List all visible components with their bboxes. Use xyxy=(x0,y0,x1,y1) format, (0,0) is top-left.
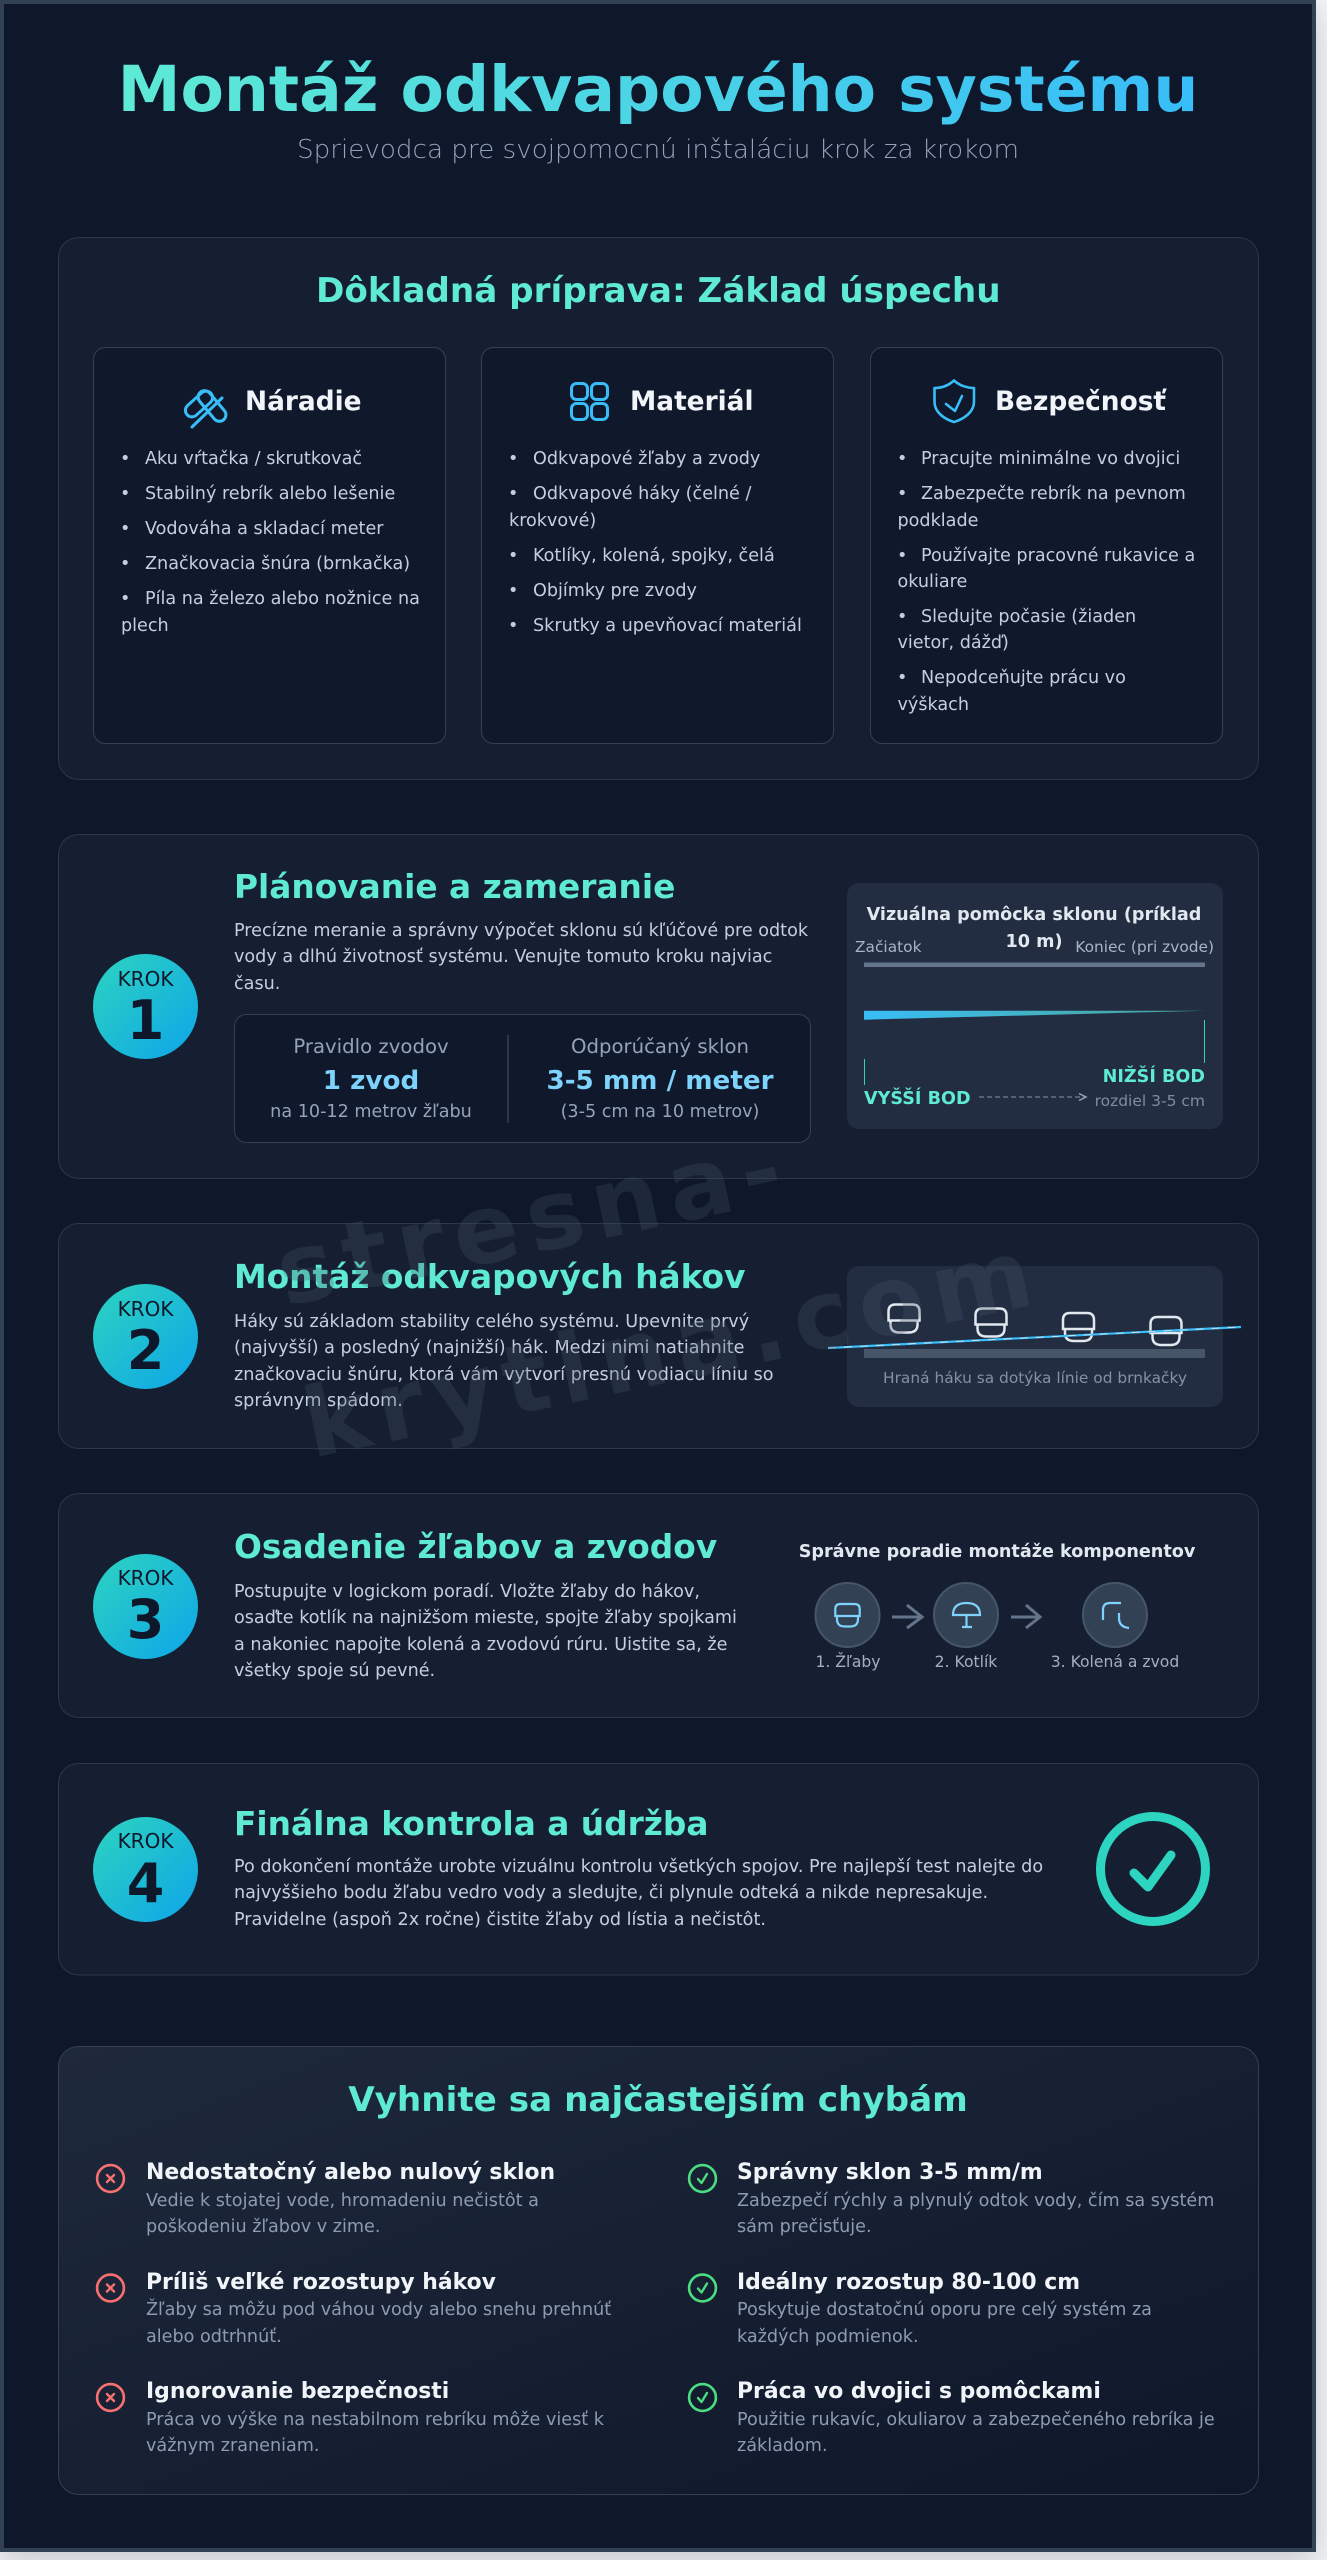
list: tools: Značkovacia šnúra (brnkačka) xyxy=(145,554,410,574)
item: right 3: Práca vo dvojici s pomôckami xyxy=(737,2379,1101,2404)
list: material: Odkvapové žľaby a zvody xyxy=(533,449,760,469)
card heading: tools: Náradie xyxy=(245,386,362,417)
text: step 3 xyxy=(234,1582,737,1681)
list: safety: • xyxy=(897,668,907,688)
heading: preparation: Dôkladná príprava: Základ úspechu xyxy=(316,271,1001,311)
list: safety: • xyxy=(897,607,907,627)
icon: hook 4 xyxy=(1150,1317,1182,1345)
text: step 3: osaďte kotlík na najnižšom mieste, spojte žľaby spojkami xyxy=(234,1608,737,1628)
icon: elbow xyxy=(1083,1583,1147,1647)
chart: slope diagram xyxy=(847,883,1223,1129)
icon: check xyxy=(1100,1816,1206,1922)
badge: step 3 xyxy=(93,1554,198,1659)
list: safety: • xyxy=(897,484,907,504)
chart: hooks diagram: Hraná háku sa dotýka línie od brnkačky xyxy=(883,1369,1187,1387)
badge: step 2 xyxy=(93,1284,198,1389)
item: wrong 1: Nedostatočný alebo nulový sklon xyxy=(146,2160,555,2185)
chart: assembly order: Správne poradie montáže komponentov xyxy=(799,1542,1196,1562)
list: material: • xyxy=(508,616,518,636)
icon: hook 1 xyxy=(888,1304,920,1332)
chart: slope diagram: Vizuálna pomôcka sklonu (príklad xyxy=(867,905,1201,925)
item: right 2: Ideálny rozostup 80-100 cm xyxy=(737,2270,1080,2295)
list: material: Odkvapové háky (čelné / xyxy=(533,484,751,504)
list: safety: vietor, dážď) xyxy=(898,633,1009,653)
heading: mistakes: Vyhnite sa najčastejším chybám xyxy=(348,2080,968,2120)
item: right 1 xyxy=(689,2160,1214,2237)
text: step 3: Postupujte v logickom poradí. Vložte žľaby do hákov, xyxy=(234,1582,700,1602)
list: tools: • xyxy=(120,484,130,504)
item: right 1: sám prečisťuje. xyxy=(737,2217,872,2237)
heading: step 2: Montáž odkvapových hákov xyxy=(234,1258,745,1296)
stat: slope: (3-5 cm na 10 metrov) xyxy=(561,1102,759,1122)
icon: hook 3 xyxy=(1063,1313,1094,1341)
list: tools: • xyxy=(120,449,130,469)
text: step 1: vody a dlhú životnosť systému. Venujte tomuto kroku najviac xyxy=(234,947,772,967)
item: right 3: Použitie rukavíc, okuliarov a zabezpečeného rebríka je xyxy=(737,2410,1215,2430)
list: safety: výškach xyxy=(898,695,969,715)
text: step 4: Po dokončení montáže urobte vizuálnu kontrolu všetkých spojov. Pre najlepší test nalejte do xyxy=(234,1857,1043,1877)
text: step 2: značkovaciu šnúru, ktorá vám vytvorí presnú vodiacu líniu so xyxy=(234,1365,774,1385)
list: material: krokvové) xyxy=(509,511,596,531)
list: tools: • xyxy=(120,519,130,539)
icon: outlet xyxy=(934,1583,998,1647)
badge: step 1: 1 xyxy=(127,989,164,1052)
labels xyxy=(815,1652,1179,1671)
chart: slope diagram: VYŠŠÍ BOD xyxy=(864,1087,971,1109)
icon: gutter xyxy=(816,1583,880,1647)
icon: shield xyxy=(934,380,974,422)
badge: step 3: 3 xyxy=(127,1588,164,1651)
icon: tools xyxy=(183,388,229,427)
chart: slope diagram: Začiatok xyxy=(855,938,922,956)
item: wrong 3: Ignorovanie bezpečnosti xyxy=(146,2379,449,2404)
stat: slope xyxy=(546,1035,774,1122)
text: step 2 xyxy=(234,1312,774,1411)
list: material: • xyxy=(508,484,518,504)
item: wrong 3: vážnym zraneniam. xyxy=(146,2436,320,2456)
panel: mistakes xyxy=(58,2046,1258,2494)
stat: downspout rule xyxy=(270,1035,472,1122)
item: right 2: každých podmienok. xyxy=(737,2327,919,2347)
text: step 1: Precízne meranie a správny výpočet sklonu sú kľúčové pre odtok xyxy=(234,921,809,941)
list: safety: • xyxy=(897,546,907,566)
text: step 1: času. xyxy=(234,974,280,994)
item: right 2 xyxy=(689,2270,1152,2347)
subtitle: Sprievodca pre svojpomocnú inštaláciu krok za krokom xyxy=(297,135,1019,165)
item: wrong 2: Príliš veľké rozostupy hákov xyxy=(146,2270,496,2295)
list: material: Kotlíky, kolená, spojky, čelá xyxy=(533,546,775,566)
item: wrong 2: alebo odtrhnúť. xyxy=(146,2327,282,2347)
list: material: • xyxy=(508,581,518,601)
list: material: • xyxy=(508,546,518,566)
stat: downspout rule: na 10-12 metrov žľabu xyxy=(270,1102,472,1122)
text: step 3: a nakoniec napojte kolená a zvodovú rúru. Uistite sa, že xyxy=(234,1635,727,1655)
text: step 4 xyxy=(234,1857,1043,1930)
item: right 3: základom. xyxy=(737,2436,828,2456)
list: safety: okuliare xyxy=(898,572,967,592)
item: wrong 1 xyxy=(97,2160,555,2237)
heading: step 3: Osadenie žľabov a zvodov xyxy=(234,1528,717,1566)
text: step 2: Háky sú základom stability celého systému. Upevnite prvý xyxy=(234,1312,749,1332)
item: right 3 xyxy=(689,2379,1215,2456)
list: material: • xyxy=(508,449,518,469)
badge: step 2: KROK xyxy=(118,1297,174,1321)
badge: step 4: 4 xyxy=(127,1852,164,1915)
list: material: Objímky pre zvody xyxy=(533,581,697,601)
labels: 2. Kotlík xyxy=(935,1653,997,1671)
icon: hook 2 xyxy=(976,1308,1006,1336)
watermark xyxy=(266,1110,1051,1480)
list: tools: Aku vŕtačka / skrutkovač xyxy=(145,449,362,469)
panel: step 4 xyxy=(58,1764,1258,1975)
badge: step 4 xyxy=(93,1817,198,1922)
panel: step 3 xyxy=(58,1494,1258,1718)
text: step 2: (najvyšší) a posledný (najnižší) hák. Medzi nimi natiahnite xyxy=(234,1338,744,1358)
list: safety: Zabezpečte rebrík na pevnom xyxy=(921,484,1186,504)
badge: step 4: KROK xyxy=(118,1829,174,1853)
badge: step 1: KROK xyxy=(118,967,174,991)
text: step 1 xyxy=(234,921,809,994)
stat: downspout rule: 1 zvod xyxy=(323,1066,419,1096)
list: tools xyxy=(120,449,420,636)
arrow xyxy=(892,1605,922,1628)
list: tools: Píla na železo alebo nožnice na xyxy=(145,589,420,609)
heading: step 4: Finálna kontrola a údržba xyxy=(234,1805,708,1843)
list: safety: Používajte pracovné rukavice a xyxy=(921,546,1195,566)
badge: step 2: 2 xyxy=(127,1319,164,1382)
stat: downspout rule: Pravidlo zvodov xyxy=(293,1035,449,1058)
card heading: material: Materiál xyxy=(630,386,754,417)
item: wrong 1: Vedie k stojatej vode, hromadeniu nečistôt a xyxy=(146,2191,539,2211)
list: material xyxy=(508,449,802,636)
chart: slope diagram: rozdiel 3-5 cm xyxy=(1095,1092,1205,1110)
text: step 3: všetky spoje sú pevné. xyxy=(234,1661,435,1681)
item: right 1: Správny sklon 3-5 mm/m xyxy=(737,2160,1043,2185)
stat: slope: Odporúčaný sklon xyxy=(571,1035,749,1058)
text: step 2: správnym spádom. xyxy=(234,1391,403,1411)
chart: slope diagram: 10 m) xyxy=(1006,932,1062,952)
list: tools: • xyxy=(120,589,130,609)
list: tools: Stabilný rebrík alebo lešenie xyxy=(145,484,395,504)
card heading: safety: Bezpečnosť xyxy=(995,386,1167,417)
badge: step 1 xyxy=(93,954,198,1059)
item: wrong 2: Žľaby sa môžu pod váhou vody alebo snehu prehnúť xyxy=(146,2298,611,2320)
list: safety xyxy=(897,449,1195,715)
panel: step 1 xyxy=(58,834,1258,1178)
labels: 3. Kolená a zvod xyxy=(1051,1653,1179,1671)
list: tools: • xyxy=(120,554,130,574)
item: right 2: Poskytuje dostatočnú oporu pre celý systém za xyxy=(737,2300,1152,2320)
list: safety: Pracujte minimálne vo dvojici xyxy=(921,449,1180,469)
title: Montáž odkvapového systému xyxy=(118,52,1198,126)
stats box xyxy=(234,1014,810,1142)
watermark: stresna- xyxy=(266,1110,801,1328)
item: right 1: Zabezpečí rýchly a plynulý odtok vody, čím sa systém xyxy=(737,2191,1214,2211)
badge: step 3: KROK xyxy=(118,1566,174,1590)
chart: hooks diagram xyxy=(828,1266,1241,1407)
card: tools xyxy=(94,348,446,744)
chart: slope diagram: NIŽŠÍ BOD xyxy=(1103,1065,1205,1087)
text: step 4: najvyššieho bodu žľabu vedro vody a sledujte, či plynule odteká a nikde nepresakuje. xyxy=(234,1883,988,1903)
item: wrong 2 xyxy=(97,2270,611,2347)
watermark: krytina.com xyxy=(293,1215,1051,1480)
list: safety: Sledujte počasie (žiaden xyxy=(921,607,1136,627)
list: safety: podklade xyxy=(898,511,978,531)
panel: preparation xyxy=(58,238,1258,780)
panel: step 2 xyxy=(58,1224,1258,1448)
heading: step 1: Plánovanie a zameranie xyxy=(234,868,675,906)
icon: material xyxy=(572,384,608,420)
list: safety: Nepodceňujte prácu vo xyxy=(921,668,1126,688)
labels: 1. Žľaby xyxy=(815,1652,881,1671)
item: wrong 3: Práca vo výške na nestabilnom rebríku môže viesť k xyxy=(146,2410,605,2430)
stat: slope: 3-5 mm / meter xyxy=(546,1066,774,1096)
card: safety xyxy=(870,348,1222,744)
list: safety: • xyxy=(897,449,907,469)
chart: slope diagram: Koniec (pri zvode) xyxy=(1075,938,1214,956)
arrow xyxy=(1011,1605,1040,1628)
list: tools: Vodováha a skladací meter xyxy=(145,519,384,539)
card: material xyxy=(482,348,834,744)
item: wrong 1: poškodeniu žľabov v zime. xyxy=(146,2217,380,2237)
item: wrong 3 xyxy=(97,2379,605,2456)
chart: assembly order xyxy=(799,1542,1196,1671)
list: material: Skrutky a upevňovací materiál xyxy=(533,616,802,636)
text: step 4: Pravidelne (aspoň 2x ročne) čistite žľaby od lístia a nečistôt. xyxy=(234,1910,766,1930)
list: tools: plech xyxy=(121,616,169,636)
